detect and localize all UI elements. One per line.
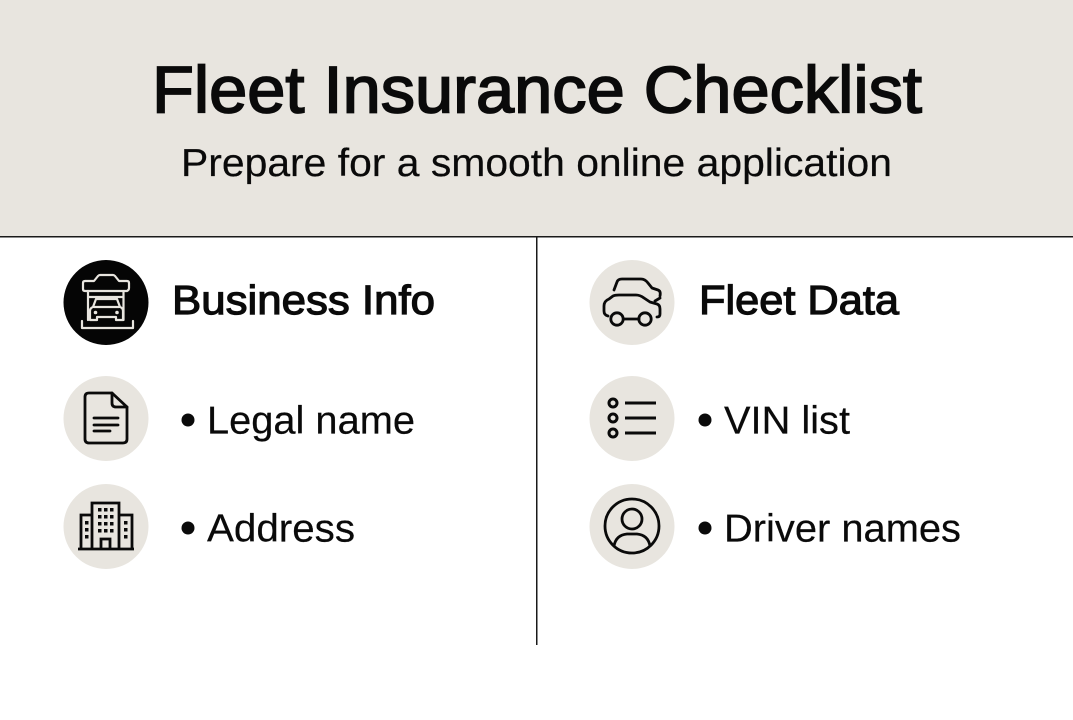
icon: list bbox=[590, 376, 674, 461]
icon: driver bbox=[590, 484, 674, 569]
panel: business info bbox=[64, 260, 435, 569]
item: driver names: Driver names bbox=[724, 508, 961, 550]
header panel bbox=[0, 0, 1073, 236]
heading: business info: Business Info bbox=[172, 277, 435, 323]
heading: fleet data: Fleet Data bbox=[699, 277, 899, 323]
icon: cars bbox=[590, 260, 674, 345]
item: legal name: Legal name bbox=[207, 400, 415, 442]
item: address: Address bbox=[207, 508, 355, 550]
title: Fleet Insurance Checklist bbox=[152, 52, 922, 126]
icon: document bbox=[64, 376, 148, 461]
item: vin list: VIN list bbox=[724, 400, 850, 442]
icon: truck in garage bbox=[64, 260, 148, 345]
subtitle: Prepare for a smooth online application bbox=[181, 142, 892, 185]
panel: fleet data bbox=[590, 260, 961, 569]
icon: office building bbox=[64, 484, 148, 569]
